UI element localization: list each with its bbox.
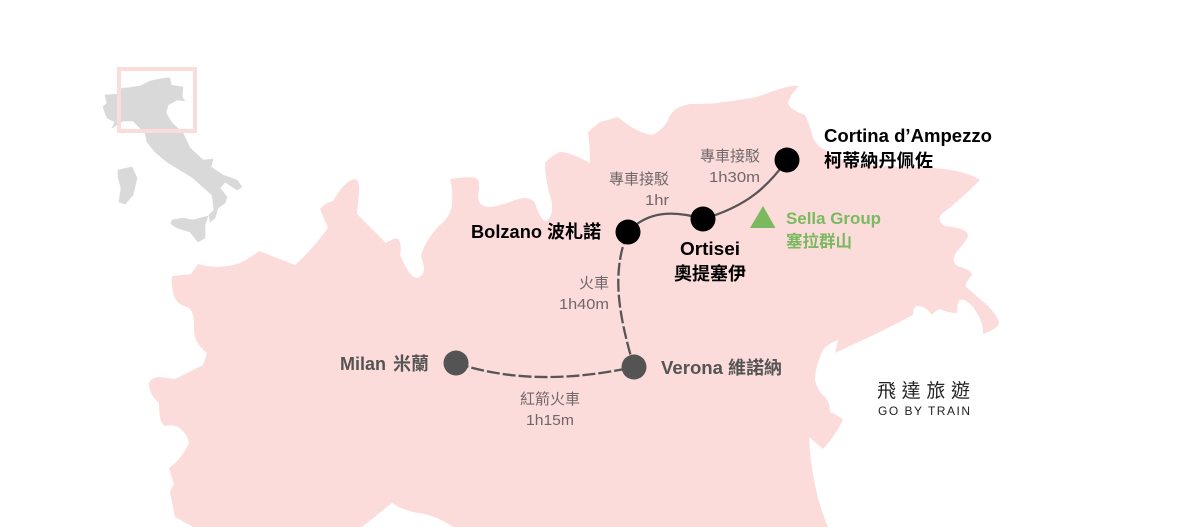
label: Sella Group: Sella Group <box>786 210 881 228</box>
route: Cortina to Ortisei to Bolzano <box>628 160 787 232</box>
logo: Go By Train: GO BY TRAIN <box>878 404 970 418</box>
travel time: Bolzano to Ortisei <box>609 171 669 209</box>
stop: Verona <box>622 354 646 380</box>
travel time: Milan to Verona: 1h15m <box>526 412 574 429</box>
travel time: Verona to Bolzano: 1h40m <box>559 296 609 313</box>
stop: Milan <box>444 350 468 376</box>
label: Bolzano <box>471 222 601 242</box>
Sicily <box>171 216 208 242</box>
travel time: Milan to Verona: 紅箭火車 <box>520 390 580 408</box>
stop: Ortisei <box>690 206 716 232</box>
label: Bolzano: Bolzano <box>471 222 542 242</box>
stop: Cortina <box>774 148 800 172</box>
label: Sella Group: 塞拉群山 <box>786 231 852 251</box>
travel time: Verona to Bolzano <box>559 275 609 313</box>
travel time: Ortisei to Cortina: 專車接駁 <box>700 148 760 165</box>
label: Ortisei: 奧提塞伊 <box>674 263 746 284</box>
logo: Go By Train <box>877 380 970 418</box>
label: Milan <box>340 354 429 374</box>
icon: mountain triangle <box>750 206 776 228</box>
travel time: Ortisei to Cortina <box>700 148 760 186</box>
label: Ortisei: Ortisei <box>680 239 740 259</box>
map: Italy locator <box>103 78 242 242</box>
label: Cortina d'Ampezzo: 柯蒂納丹佩佐 <box>824 151 933 171</box>
label: Ortisei <box>674 239 746 284</box>
stop: Bolzano <box>616 220 640 244</box>
logo: Go By Train: 飛達旅遊 <box>877 380 970 402</box>
route: Milan to Verona, dashed <box>456 363 634 377</box>
label: Milan: 米蘭 <box>393 354 429 374</box>
label: Verona: Verona <box>661 358 724 378</box>
travel time: Verona to Bolzano: 火車 <box>579 275 609 292</box>
route: Bolzano to Verona, dashed <box>618 232 634 367</box>
Italy mainland <box>103 78 242 222</box>
label: Verona: 維諾納 <box>728 358 782 378</box>
travel time: Milan to Verona <box>520 390 580 429</box>
label: Bolzano: 波札諾 <box>547 222 601 242</box>
label: Cortina d'Ampezzo <box>824 126 992 171</box>
travel time: Bolzano to Ortisei: 專車接駁 <box>609 171 669 188</box>
map: northern Italy region <box>149 86 999 527</box>
locator frame <box>119 69 195 131</box>
travel time: Ortisei to Cortina: 1h30m <box>709 169 760 186</box>
Sardinia <box>118 167 137 204</box>
label: Sella Group <box>786 210 881 251</box>
label: Milan: Milan <box>340 354 386 374</box>
label: Cortina d'Ampezzo: Cortina d’Ampezzo <box>824 126 992 146</box>
label: Verona <box>661 358 782 378</box>
travel time: Bolzano to Ortisei: 1hr <box>645 192 669 209</box>
